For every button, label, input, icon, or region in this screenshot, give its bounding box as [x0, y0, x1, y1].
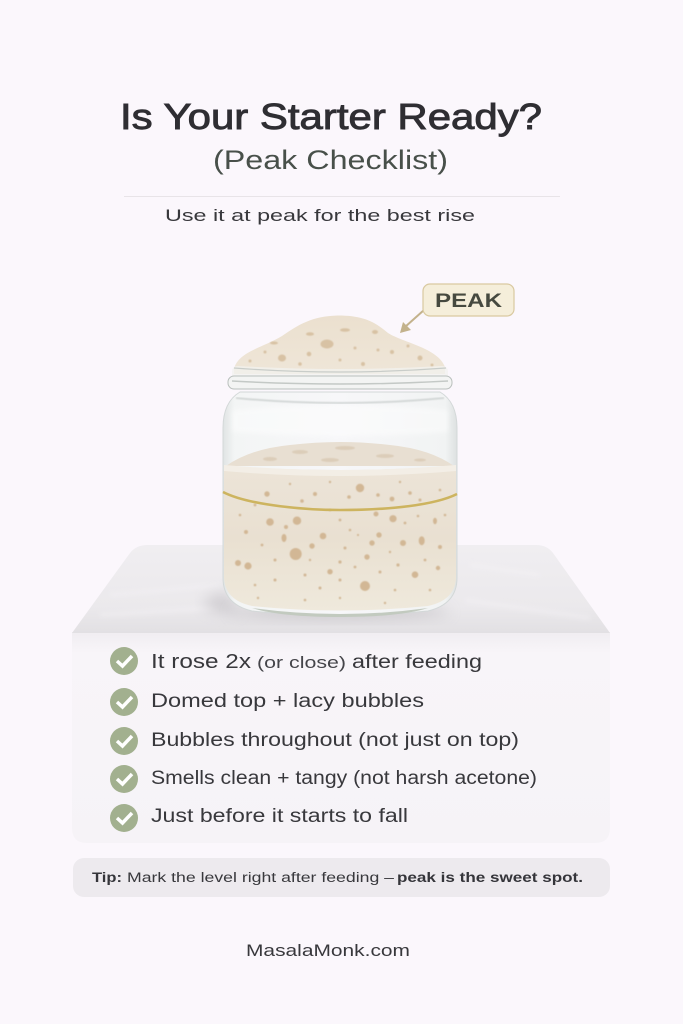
- peak callout: [400, 284, 514, 333]
- item 5: Just before it starts to fall: [151, 806, 408, 827]
- item 1: (or close): [257, 653, 346, 672]
- item 1: [110, 647, 482, 675]
- tip box: Mark the level right after feeding –: [127, 870, 395, 885]
- item 1: It rose 2x: [151, 651, 251, 673]
- item 2: [110, 688, 424, 716]
- checklist: [110, 647, 537, 832]
- callout label: PEAK: [435, 291, 502, 312]
- tagline: Use it at peak for the best rise: [165, 207, 475, 225]
- title: Is Your Starter Ready?: [120, 96, 542, 137]
- item 5: [110, 804, 408, 832]
- starter surface: [226, 442, 454, 466]
- glass base: [252, 608, 428, 617]
- item 4: [110, 765, 537, 793]
- tip box: peak is the sweet spot.: [397, 870, 583, 885]
- tip box: Tip:: [92, 870, 122, 885]
- subtitle: (Peak Checklist): [213, 145, 448, 175]
- jar rim: [228, 366, 452, 389]
- jar with risen starter: [223, 316, 457, 617]
- item 4: Smells clean + tangy (not harsh acetone): [151, 768, 537, 789]
- tip box: [73, 858, 610, 897]
- item 2: Domed top + lacy bubbles: [151, 691, 424, 712]
- jar glass body: [223, 392, 457, 616]
- item 3: [110, 727, 519, 755]
- item 1: after feeding: [352, 652, 482, 673]
- footer: site name: MasalaMonk.com: [246, 942, 410, 960]
- item 3: Bubbles throughout (not just on top): [151, 730, 519, 751]
- rubber band marker: [223, 492, 457, 510]
- callout arrow: [400, 310, 424, 333]
- starter body with bubbles: [224, 465, 456, 610]
- marble slab: [72, 545, 610, 843]
- starter dome: [234, 316, 445, 374]
